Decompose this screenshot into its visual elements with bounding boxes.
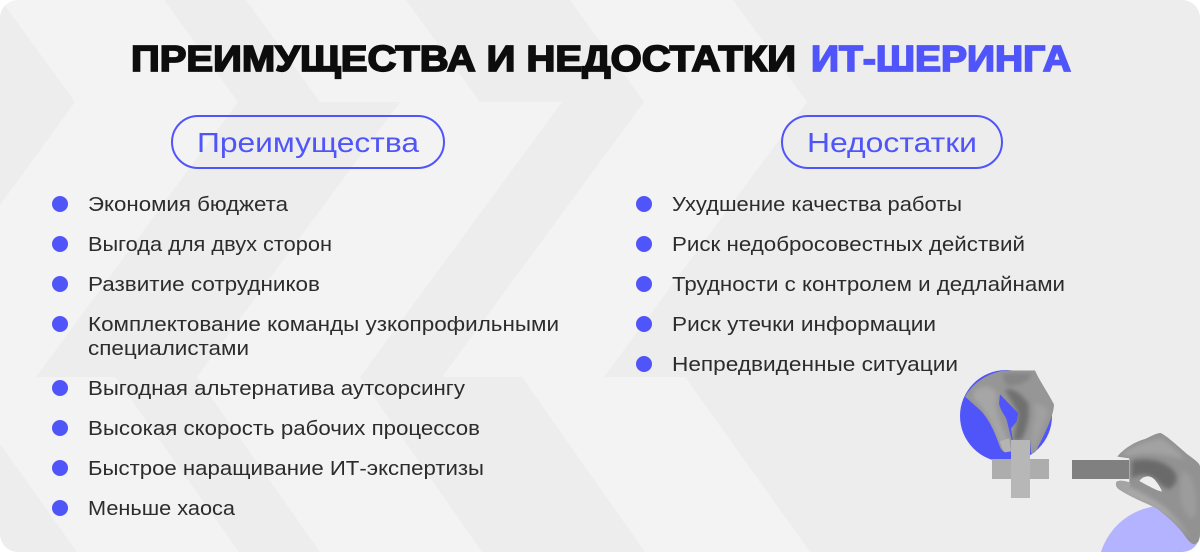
icon: blue circle xyxy=(960,370,1052,462)
icon: lilac circle xyxy=(1101,506,1200,552)
illustration: hands assembling plus and minus xyxy=(960,368,1200,552)
list: advantages: Экономия бюджета xyxy=(88,194,289,216)
list: disadvantages: Ухудшение качества работы xyxy=(672,194,962,216)
panel: advantages xyxy=(52,116,559,520)
icon: minus block xyxy=(1072,460,1129,479)
list: advantages: Меньше хаоса xyxy=(88,498,236,520)
title: ИТ-ШЕРИНГА xyxy=(811,38,1071,79)
list: disadvantages: Непредвиденные ситуации xyxy=(672,354,958,376)
list: advantages: Выгода для двух сторон xyxy=(88,234,332,256)
list: disadvantages xyxy=(636,194,1065,376)
list: disadvantages: Риск недобросовестных действий xyxy=(672,234,1025,256)
title xyxy=(131,38,1071,79)
list: advantages xyxy=(52,194,559,520)
list: advantages: Выгодная альтернатива аутсорсингу xyxy=(88,378,465,400)
list: advantages: Комплектование команды узкопрофильными xyxy=(88,314,559,336)
list: advantages: Быстрое наращивание ИТ-экспертизы xyxy=(88,458,484,480)
list: disadvantages: Трудности с контролем и дедлайнами xyxy=(672,274,1065,296)
icon: plus block xyxy=(992,440,1049,498)
list: advantages: Высокая скорость рабочих процессов xyxy=(88,418,480,440)
icon: right hand xyxy=(1113,430,1200,545)
icon: upper hand xyxy=(963,368,1057,455)
list: advantages: специалистами xyxy=(88,338,249,360)
heading pill: disadvantages: Недостатки xyxy=(807,127,977,158)
list: advantages: Развитие сотрудников xyxy=(88,274,320,296)
heading pill: advantages xyxy=(172,116,444,168)
heading pill: advantages: Преимущества xyxy=(197,127,419,158)
list: disadvantages: Риск утечки информации xyxy=(672,314,936,336)
title: ПРЕИМУЩЕСТВА И НЕДОСТАТКИ xyxy=(131,38,796,79)
heading pill: disadvantages xyxy=(782,116,1002,168)
panel: disadvantages xyxy=(636,116,1065,376)
